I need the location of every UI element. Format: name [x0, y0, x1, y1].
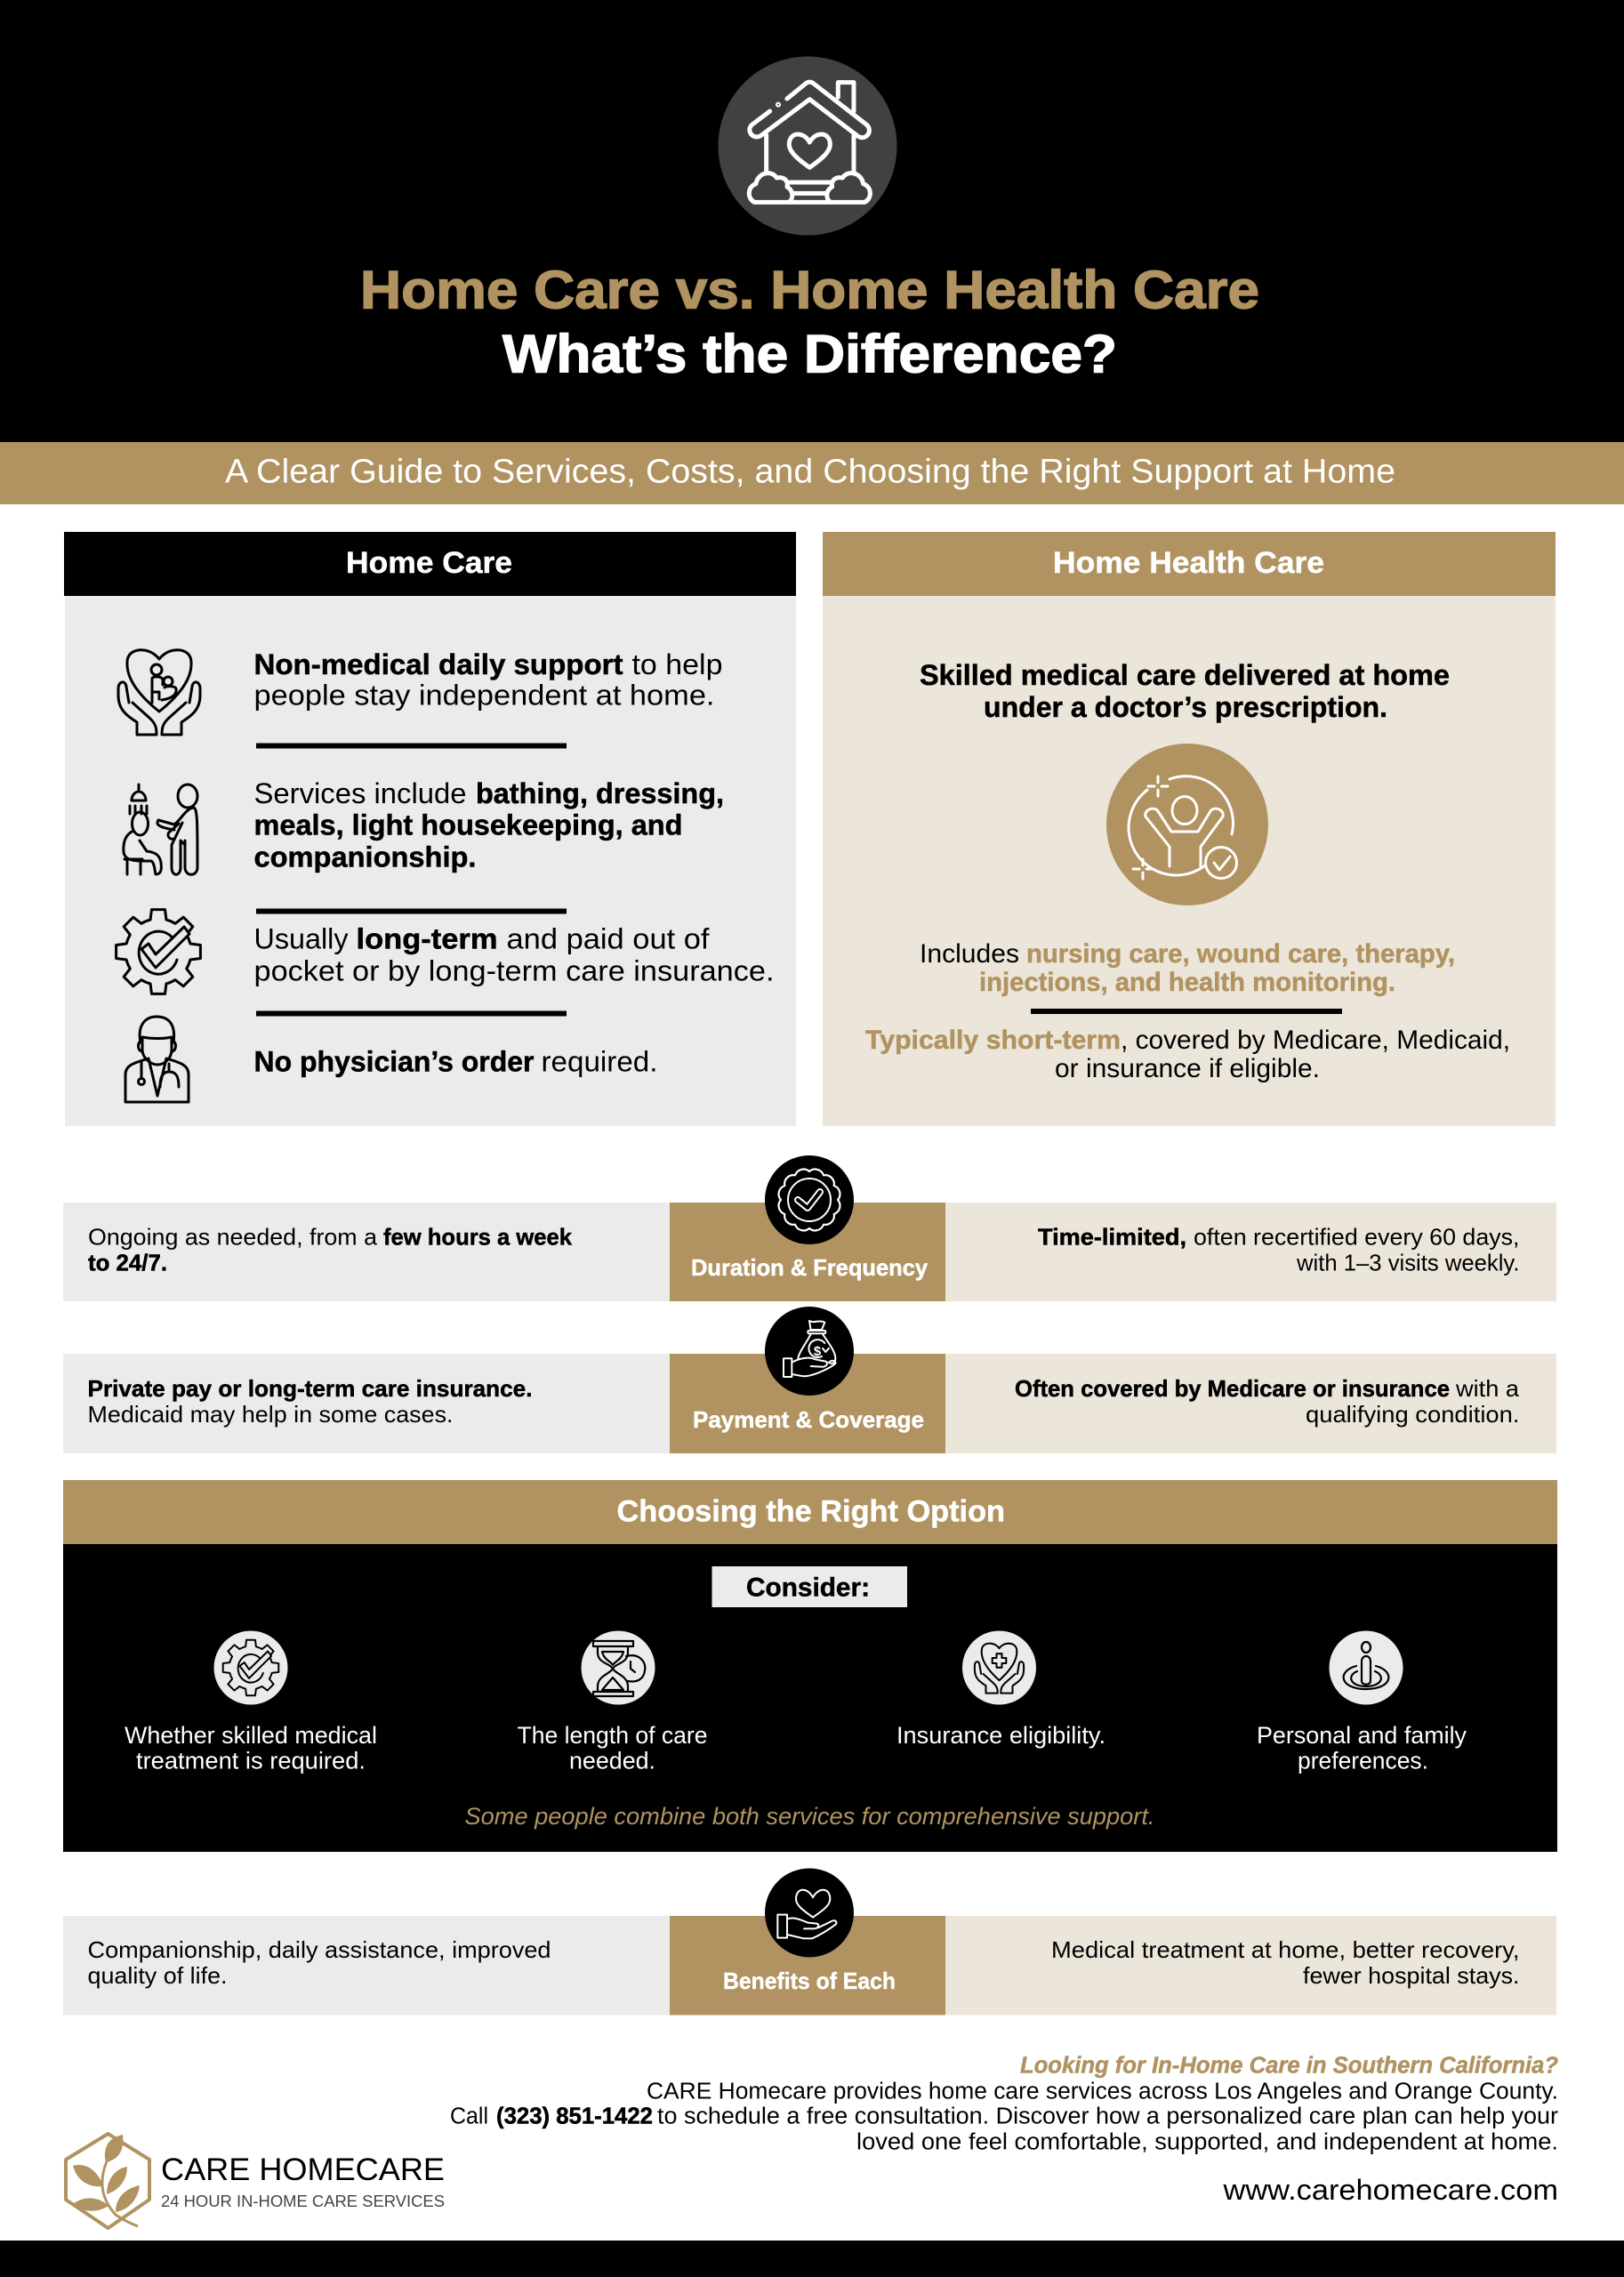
label: consider: Consider:: [746, 1573, 870, 1603]
icon: hexagon with leaves: [66, 2134, 149, 2228]
text: skilled medical care: Skilled medical care delivered at home: [920, 659, 1450, 691]
text: personal preferences: [1257, 1722, 1467, 1774]
text: typically short-term: or insurance if eligible.: [1055, 1054, 1320, 1083]
heading: home care: [64, 532, 796, 596]
text: services include: bathing, dressing,: [476, 777, 724, 809]
text: home care duration: to 24/7.: [88, 1249, 167, 1275]
text: home care duration: Ongoing as needed, from a: [88, 1224, 378, 1251]
text: includes services: nursing care, wound care, therapy,: [1026, 939, 1455, 969]
text: home care benefits: [87, 1936, 551, 1989]
tagline: 24 HOUR IN-HOME CARE SERVICES: [161, 2192, 445, 2210]
wordmark: CARE HOMECARE: [161, 2152, 445, 2187]
icon: house with heart: [719, 57, 896, 235]
subtitle band: A Clear Guide to Services, Costs, and Choosing the Right Support at Home: [225, 454, 1395, 491]
text: home health payment: qualifying condition.: [1306, 1401, 1519, 1428]
text: non-medical support: Non-medical daily support: [254, 648, 623, 680]
icon: healthy person with check: [1106, 744, 1268, 905]
title: Home Care vs. Home Health Care: [360, 260, 1259, 320]
text: includes services: injections, and health monitoring.: [979, 968, 1395, 997]
heading: choosing the right option: Choosing the Right Option: [617, 1494, 1005, 1528]
section: choosing the right option: [63, 1480, 1557, 1852]
text: usually long-term: Usually: [254, 923, 349, 955]
text: no physician's order: No physician’s order: [254, 1046, 535, 1078]
icon: badge with check: [765, 1155, 854, 1244]
text: insurance eligibility: Insurance eligibility.: [896, 1722, 1105, 1749]
text: usually long-term: long-term: [356, 923, 498, 955]
text: includes services: Includes: [920, 939, 1019, 969]
call to action text: [450, 2053, 1559, 2154]
heading: home health care: [823, 532, 1556, 596]
text: services include: [254, 777, 724, 873]
text: usually long-term: pocket or by long-term care insurance.: [254, 955, 775, 987]
icon: caregiver with shower: [124, 784, 197, 874]
text: skilled treatment: treatment is required.: [136, 1747, 366, 1774]
panel: home care: [64, 532, 796, 1126]
logo: care homecare: [66, 2134, 445, 2228]
icon: hourglass and clock: [582, 1631, 655, 1704]
call to action text: (323) 851-1422: [496, 2104, 653, 2129]
text: non-medical support: to help: [631, 648, 722, 680]
text: home care duration: few hours a week: [383, 1224, 573, 1251]
text: usually long-term: [254, 923, 775, 987]
text: non-medical support: people stay independent at home.: [254, 680, 715, 712]
text: length of care: needed.: [569, 1747, 655, 1774]
text: length of care: The length of care: [518, 1722, 708, 1749]
label: benefits of each: Benefits of Each: [723, 1967, 896, 1994]
row: payment and coverage: [63, 1307, 1556, 1453]
text: home health duration: Time-limited,: [1038, 1224, 1186, 1251]
icon: hand with money bag: [765, 1307, 854, 1396]
text: home health payment: Often covered by Medicare or insurance: [1015, 1375, 1450, 1402]
header banner: [0, 0, 1624, 442]
text: skilled treatment: Whether skilled medical: [125, 1722, 377, 1749]
text: home care payment: [87, 1375, 532, 1428]
text: typically short-term: , covered by Medicare, Medicaid,: [1121, 1026, 1510, 1055]
footer bar: [0, 2241, 1624, 2277]
text: home health benefits: fewer hospital stays.: [1303, 1962, 1519, 1989]
text: home health payment: with a: [1455, 1375, 1520, 1402]
subtitle band: [0, 442, 1624, 504]
heading: home care: Home Care: [346, 546, 512, 580]
text: services include: Services include: [254, 777, 466, 809]
text: home health benefits: Medical treatment at home, better recovery,: [1051, 1936, 1519, 1963]
text: skilled treatment: [125, 1722, 377, 1774]
website: www.carehomecare.com: [1222, 2174, 1558, 2206]
title: What’s the Difference?: [502, 324, 1117, 384]
label: duration and frequency: Duration & Frequency: [691, 1254, 929, 1281]
icon: hand holding heart: [765, 1868, 854, 1957]
panel: home health care: [823, 532, 1556, 1126]
heading: home health care: Home Health Care: [1053, 546, 1324, 580]
icon: doctor: [125, 1017, 189, 1102]
text: no physician's order: required.: [541, 1046, 658, 1078]
text: usually long-term: and paid out of: [507, 923, 711, 955]
icon: hands holding heart with family: [118, 650, 200, 735]
icon: person on target: [1329, 1631, 1403, 1704]
text: services include: companionship.: [254, 841, 477, 873]
icon: gear check: [213, 1631, 288, 1704]
text: personal preferences: Personal and family: [1257, 1722, 1467, 1749]
row: benefits of each: [63, 1868, 1556, 2016]
text: home care payment: Private pay or long-term care insurance.: [87, 1375, 532, 1402]
text: services include: meals, light housekeeping, and: [254, 809, 683, 841]
label: payment and coverage: Payment & Coverage: [693, 1406, 924, 1433]
text: home health duration: often recertified every 60 days,: [1194, 1224, 1519, 1251]
title: [360, 260, 1259, 384]
call to action text: Call: [450, 2104, 488, 2129]
call to action text: CARE Homecare provides home care services across Los Angeles and Orange County.: [647, 2080, 1558, 2104]
text: home care benefits: Companionship, daily assistance, improved: [87, 1936, 551, 1963]
label: consider: [712, 1566, 907, 1607]
text: home care payment: Medicaid may help in some cases.: [87, 1401, 454, 1428]
icon: gear with check: [117, 910, 200, 994]
icon: hands with medical heart: [962, 1631, 1036, 1704]
text: typically short-term: Typically short-term: [865, 1026, 1121, 1055]
text: non-medical support: [254, 648, 722, 712]
text: personal preferences: preferences.: [1298, 1747, 1428, 1774]
text: home health duration: with 1–3 visits weekly.: [1296, 1249, 1519, 1275]
text: skilled medical care: [920, 659, 1450, 723]
text: home health benefits: [1051, 1936, 1519, 1989]
icon: hand with money bag: $: [814, 1344, 822, 1359]
row: duration and frequency: [63, 1155, 1556, 1301]
text: home care duration: [88, 1224, 573, 1275]
text: typically short-term: [865, 1026, 1510, 1083]
text: home care benefits: quality of life.: [87, 1962, 227, 1989]
text: skilled medical care: under a doctor’s prescription.: [984, 691, 1387, 723]
call to action text: Looking for In-Home Care in Southern California?: [1020, 2053, 1558, 2078]
text: includes services: [920, 939, 1455, 997]
text: length of care: [518, 1722, 708, 1774]
text: home health payment: [1015, 1375, 1520, 1428]
call to action text: loved one feel comfortable, supported, and independent at home.: [856, 2129, 1558, 2154]
text: combine both services note: Some people combine both services for comprehensive support.: [464, 1803, 1154, 1830]
heading: choosing the right option: [63, 1480, 1557, 1544]
text: home health duration: [1038, 1224, 1519, 1275]
call to action text: to schedule a free consultation. Discover how a personalized care plan can help your: [657, 2104, 1559, 2129]
